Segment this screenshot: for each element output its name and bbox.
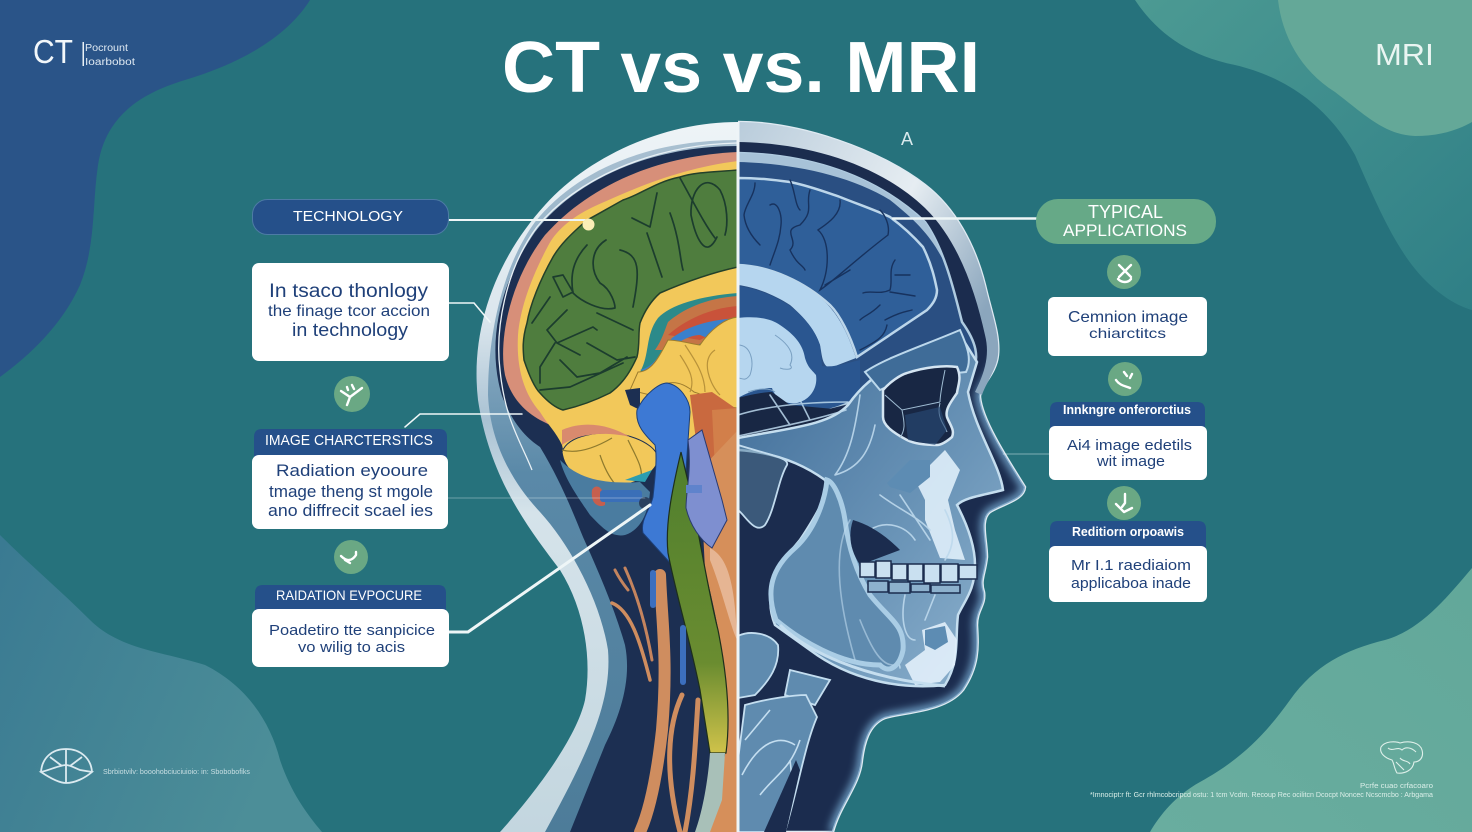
CT corner label: CT xyxy=(33,33,73,70)
tab xyxy=(1050,521,1206,552)
thin skull line xyxy=(499,143,737,470)
centre divider line xyxy=(736,122,740,832)
CT corner label: Pocrount xyxy=(85,43,128,54)
tab label: Reditiorn orpoawis xyxy=(1072,525,1184,539)
logo: bottom-left scanner xyxy=(41,749,92,783)
pill label: TECHNOLOGY xyxy=(293,208,403,225)
vertebrae xyxy=(738,633,830,832)
card xyxy=(252,609,449,667)
footer text: right: *Imnocipt:r ft: Gcr rhlmcobcripcd ostu: 1 tcm Vcdm. Recoup Rec ocilitcn Dcocpt Noncec Ncscmcbo : Arbgama xyxy=(1090,792,1433,799)
card text: vo wilig to acis xyxy=(298,639,405,656)
cerebrum folds xyxy=(532,178,727,390)
panel: MRI typical applications xyxy=(1036,199,1216,244)
pill label xyxy=(1063,202,1187,240)
eye socket xyxy=(883,366,959,445)
MRI corner label: MRI xyxy=(1375,37,1434,72)
icon: cross hand xyxy=(1107,255,1141,289)
footer text: right: Pcrfe cuao crfacoaro xyxy=(1360,783,1433,790)
bright bone chin xyxy=(905,622,957,685)
blob: top-left navy xyxy=(0,0,310,377)
cerebellum xyxy=(562,425,658,485)
upper jaw joint bone xyxy=(738,445,787,528)
card xyxy=(1048,297,1207,356)
mandible xyxy=(771,480,945,686)
purple strip detail xyxy=(686,485,702,493)
card xyxy=(1049,426,1207,480)
ventricle colour bands xyxy=(640,293,736,372)
card text: chiarctitcs xyxy=(1089,325,1166,341)
tab xyxy=(254,429,447,460)
panel: CT radiation exposure xyxy=(252,585,449,667)
card text: In tsaco thonlogy xyxy=(269,281,429,302)
outer scalp band xyxy=(738,122,998,395)
lower cord strip xyxy=(695,753,725,832)
inner dark-blue zone xyxy=(738,286,860,412)
tab label: IMAGE CHARCTERSTICS xyxy=(265,433,433,449)
head illustration: CT anatomy half xyxy=(477,122,738,832)
midbrain folds xyxy=(680,345,720,395)
title: CT vs vs. MRI xyxy=(502,28,980,108)
footer text: right xyxy=(1090,783,1433,799)
CT corner label xyxy=(33,33,135,70)
logo: bottom-right brain xyxy=(1381,742,1423,773)
head illustration: MRI X-ray half xyxy=(738,122,1025,832)
teeth xyxy=(860,561,977,593)
yellow tissue xyxy=(518,161,736,451)
brainstem blue xyxy=(637,383,690,565)
bone openings xyxy=(887,460,948,650)
blob: top-right xyxy=(1135,0,1472,310)
inner skull light band xyxy=(738,153,942,258)
card text: tmage theng st mgole xyxy=(269,482,433,501)
card text: Ai4 image edetils xyxy=(1067,437,1192,454)
icon: check leaf xyxy=(334,376,370,412)
card text xyxy=(268,461,433,520)
blob: top-right light xyxy=(1278,0,1472,136)
skull base lines xyxy=(738,395,848,436)
cerebrum blue xyxy=(738,178,937,357)
CT corner label: Ioarbobot xyxy=(85,57,135,68)
head outer band xyxy=(477,122,738,832)
pill label: APPLICATIONS xyxy=(1063,221,1187,240)
icon: sprout xyxy=(1107,486,1141,520)
panel: CT technology xyxy=(252,200,449,361)
card text: Poadetiro tte sanpicice xyxy=(269,622,435,639)
bright bone nose xyxy=(915,450,965,560)
card text: wit image xyxy=(1096,453,1165,470)
card text: applicaboa inade xyxy=(1071,575,1191,592)
skull base dark zone xyxy=(740,392,840,434)
mouth cavity xyxy=(850,520,900,565)
card text: Cemnion image xyxy=(1068,309,1188,326)
panel: MRI radiation exposure xyxy=(1049,521,1207,602)
card text: Mr I.1 raediaiom xyxy=(1071,557,1191,574)
pale highlight on strip xyxy=(710,548,737,640)
tab label: RAIDATION EVPOCURE xyxy=(276,587,422,603)
panel: CT image characteristics xyxy=(252,429,448,529)
icon: leaf dots xyxy=(1108,362,1142,396)
orange strip xyxy=(704,432,736,832)
upper orbit rim xyxy=(865,330,969,390)
pill label: TYPICAL xyxy=(1088,202,1163,222)
marker letter A: A xyxy=(901,129,913,149)
cerebrum folds xyxy=(744,180,915,350)
midbrain yellow xyxy=(630,317,738,408)
face edge glow xyxy=(833,355,1025,832)
card text: the finage tcor accion xyxy=(268,303,430,320)
connector dot xyxy=(582,218,594,230)
tab xyxy=(255,585,446,615)
card text xyxy=(1068,309,1188,341)
brainstem light blob xyxy=(738,317,816,403)
corpus callosum arc xyxy=(738,264,856,368)
skull bone mass xyxy=(738,330,1003,686)
card text: in technology xyxy=(292,320,408,340)
connector lines xyxy=(405,218,1049,632)
tab label: Innkngre onferorctius xyxy=(1063,403,1191,417)
panel: MRI common image xyxy=(1048,297,1207,356)
pill xyxy=(1036,199,1216,244)
tab xyxy=(1050,402,1205,432)
footer text: left: Sbrbiotvilv: booohobciuciuioio: in: Sbobobofiks xyxy=(103,769,251,776)
small teal and red structure xyxy=(592,470,652,509)
head dark silhouette xyxy=(738,122,1025,832)
cranium interior xyxy=(738,153,976,430)
throat blue region xyxy=(560,460,650,535)
small navy ventricle xyxy=(625,388,640,410)
neck vessels xyxy=(612,568,698,832)
spinal cord green xyxy=(667,452,728,753)
card text xyxy=(268,281,430,340)
blob: bottom-left xyxy=(0,535,322,832)
icon: figure xyxy=(334,540,368,574)
blob: bottom-right xyxy=(1150,568,1472,832)
pill: technology xyxy=(252,200,448,234)
card: technology xyxy=(252,263,449,361)
head navy interior xyxy=(495,146,738,832)
card xyxy=(252,455,448,529)
purple strip xyxy=(686,430,727,548)
card text: ano diffrecit scael ies xyxy=(268,501,433,520)
card text xyxy=(1071,557,1191,592)
card text: Radiation eyooure xyxy=(276,461,428,480)
cerebrum green xyxy=(523,170,738,410)
panel: MRI image characteristics xyxy=(1049,402,1207,480)
card text xyxy=(1067,437,1192,470)
organ right column xyxy=(690,392,736,459)
head medium band xyxy=(488,140,738,832)
card text xyxy=(269,622,435,656)
card xyxy=(1049,546,1207,602)
scalp salmon band xyxy=(503,152,738,450)
